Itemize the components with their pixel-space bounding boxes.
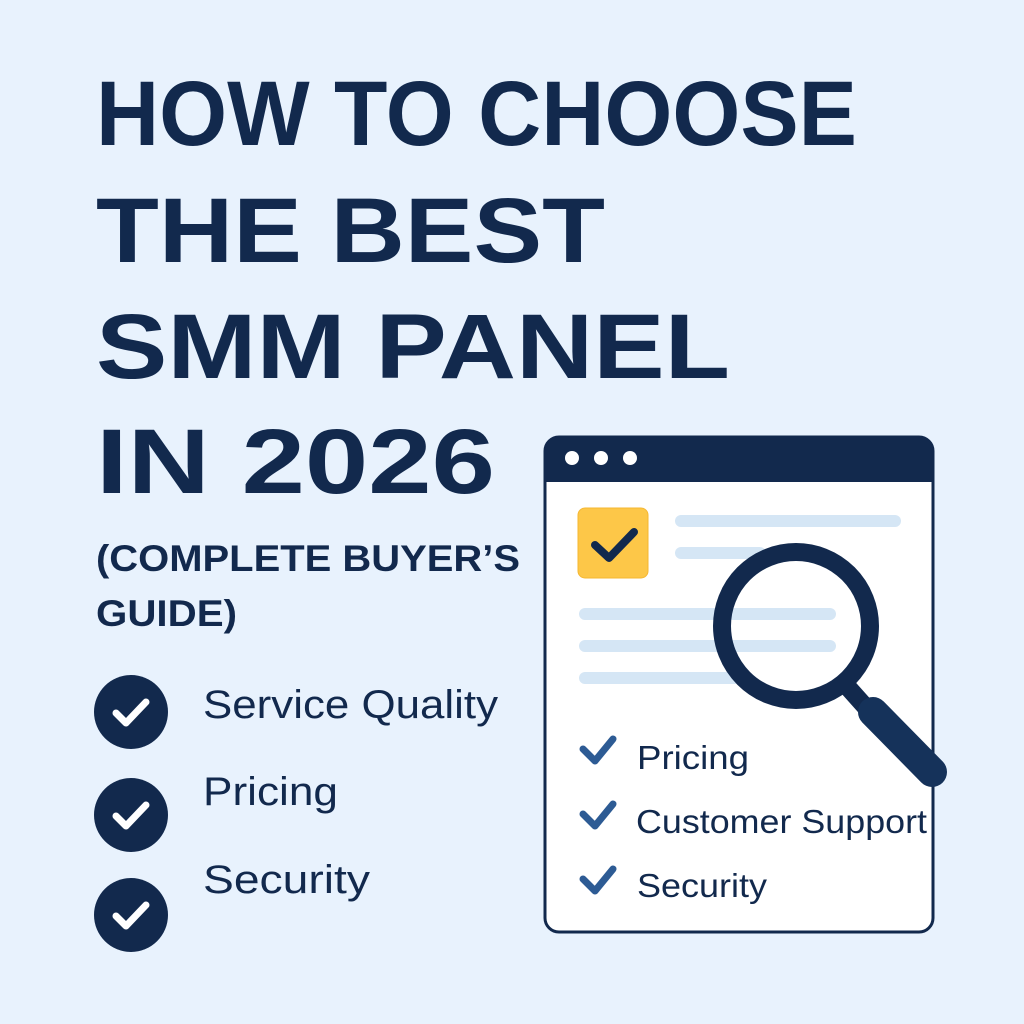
check item: Pricing: Pricing	[203, 770, 338, 814]
window checklist: Pricing	[637, 739, 749, 776]
browser window illustration	[545, 437, 933, 932]
icon: yellow checkbox	[578, 508, 648, 578]
subtitle	[96, 538, 520, 634]
subtitle: GUIDE)	[96, 593, 237, 634]
icon: magnifying glass	[722, 552, 932, 772]
checklist	[94, 675, 498, 952]
window checklist: Security	[637, 867, 768, 904]
title: HOW TO CHOOSE	[96, 63, 857, 165]
check item: Service Quality: Service Quality	[203, 683, 498, 727]
window checklist	[583, 739, 927, 904]
title: SMM PANEL	[96, 296, 730, 398]
subtitle: (COMPLETE BUYER’S	[96, 538, 520, 579]
check item: Security: Security	[203, 858, 370, 902]
title: IN 2026	[96, 411, 495, 513]
check item: Service Quality	[94, 675, 498, 749]
check item: Security	[94, 858, 370, 952]
title: THE BEST	[96, 180, 605, 282]
check item: Pricing	[94, 770, 338, 852]
window checklist: Customer Support	[636, 803, 927, 840]
title	[96, 63, 857, 513]
